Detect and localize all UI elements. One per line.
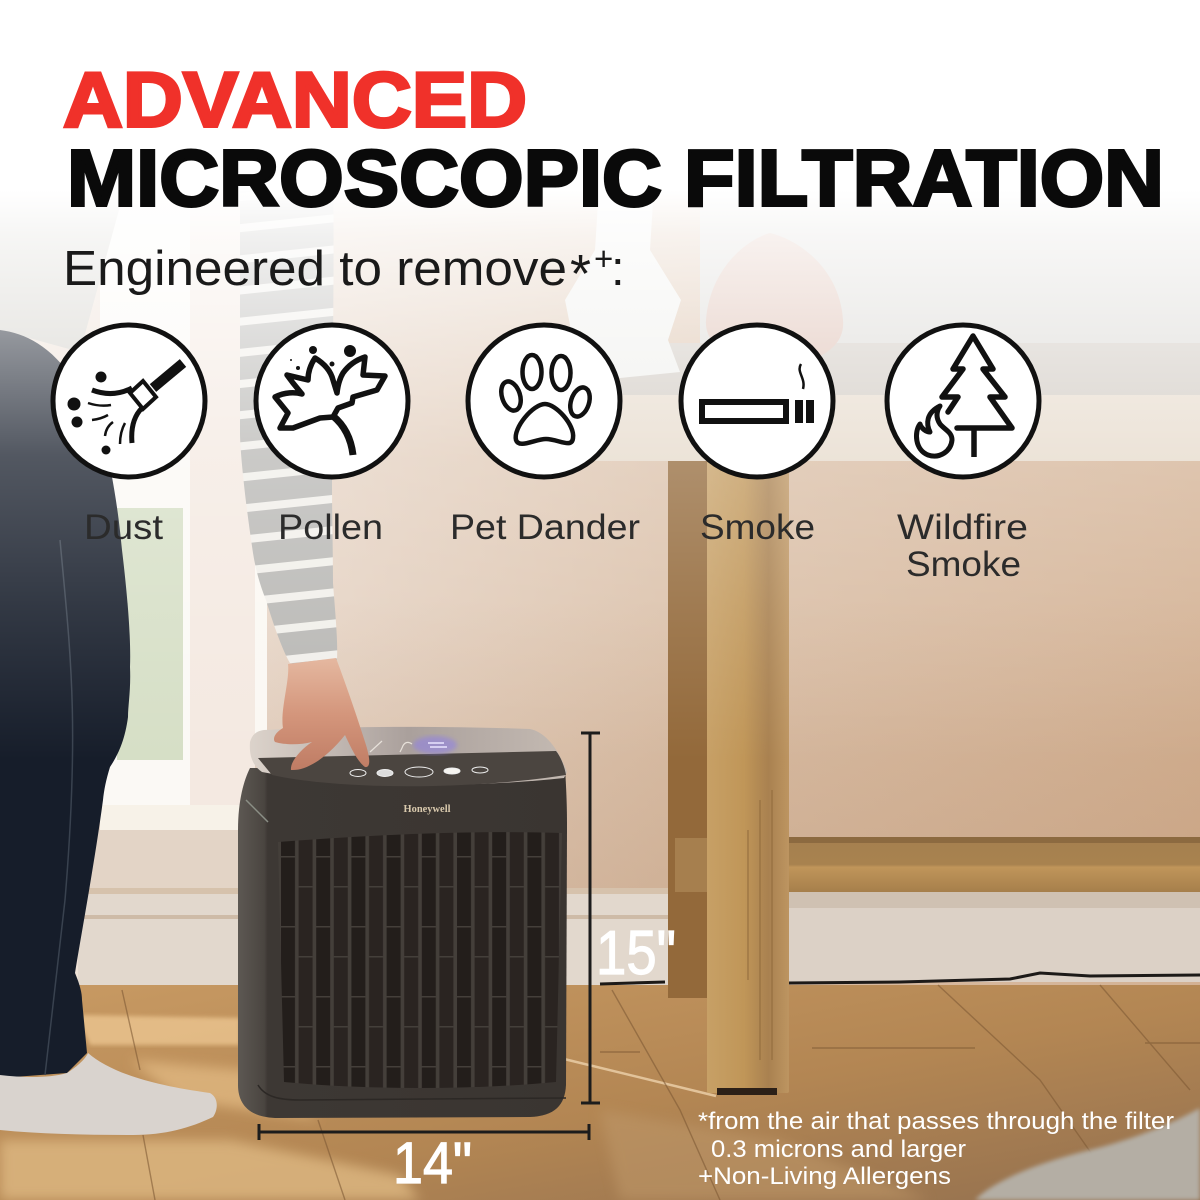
front grille	[278, 832, 562, 1088]
label: pollen: Pollen	[278, 508, 383, 547]
label: smoke: Smoke	[700, 508, 815, 547]
label: wildfire smoke	[897, 508, 1028, 584]
label: dust: Dust	[84, 508, 163, 547]
icon: smoke	[681, 325, 833, 477]
sock	[0, 1053, 217, 1135]
footnotes: *from the air that passes through the filter	[698, 1108, 1174, 1135]
sweater sleeve	[240, 170, 337, 666]
subtitle: :	[611, 242, 625, 296]
hand	[274, 658, 369, 770]
icon: dust	[53, 325, 205, 477]
title	[63, 56, 1164, 222]
sunlight on floor	[0, 1015, 930, 1200]
wood floor	[0, 985, 1200, 1200]
touch buttons	[350, 767, 488, 777]
footnotes: 0.3 microns and larger	[711, 1136, 966, 1163]
title line two: MICROSCOPIC	[67, 134, 662, 222]
subtitle: Engineered to remove	[63, 242, 567, 296]
icon: wildfire smoke	[887, 325, 1039, 477]
dimension: width: 14"	[393, 1131, 472, 1196]
label: wildfire smoke: Smoke	[906, 545, 1021, 584]
window	[78, 150, 267, 890]
subtitle: *	[570, 244, 591, 304]
brand logo: Honeywell	[404, 803, 450, 815]
white fade overlay	[0, 0, 1200, 760]
power cable	[600, 973, 1200, 984]
icon: pollen	[256, 325, 408, 477]
footnotes: +Non-Living Allergens	[698, 1163, 951, 1190]
dimension: height	[581, 733, 676, 1103]
purifier foot seam	[258, 1085, 566, 1100]
purifier control panel	[258, 751, 566, 786]
dimension: height: 15"	[596, 919, 676, 988]
skirting boards	[78, 888, 1200, 990]
label: pet dander: Pet Dander	[450, 508, 640, 547]
title line two	[67, 134, 1164, 222]
air quality lights	[370, 736, 457, 754]
label: wildfire smoke: Wildfire	[897, 508, 1028, 547]
title line two: FILTRATION	[684, 134, 1164, 222]
dimension: width	[259, 1124, 589, 1196]
icon: pet dander	[468, 325, 620, 477]
table top and vases	[540, 150, 1200, 461]
footnotes	[698, 1108, 1174, 1190]
purifier handle seam	[246, 800, 268, 822]
purifier glass lid	[250, 727, 567, 785]
subtitle: +	[594, 240, 613, 277]
title line one: ADVANCED	[63, 56, 527, 144]
other arm behind	[0, 170, 130, 352]
air purifier	[238, 727, 567, 1118]
blanket corner	[975, 1108, 1200, 1200]
table legs and rail	[668, 461, 1200, 1095]
purifier body	[238, 768, 567, 1118]
person's leg	[0, 330, 130, 1078]
floor board seams	[122, 985, 1200, 1200]
